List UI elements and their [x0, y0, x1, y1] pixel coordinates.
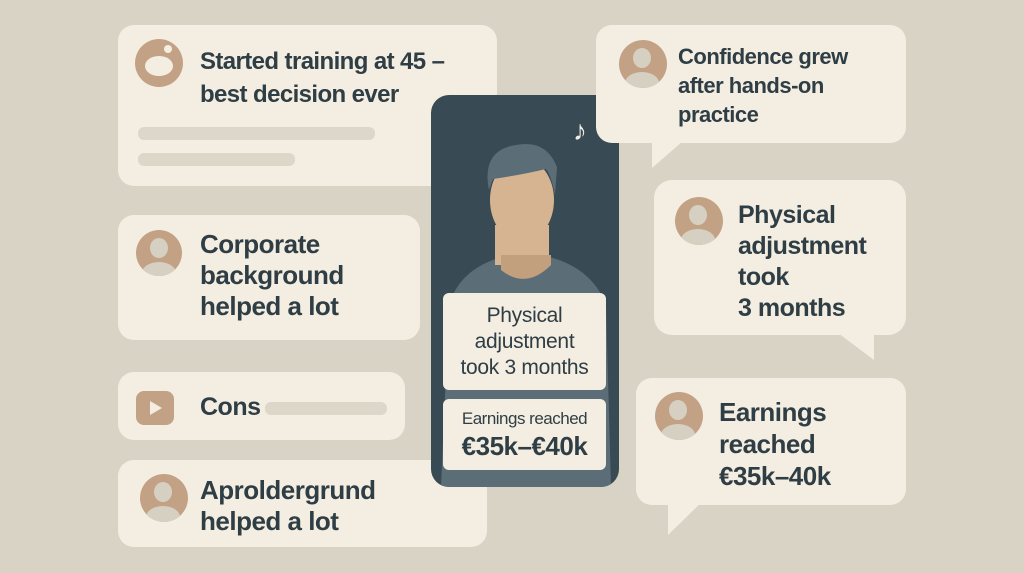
text: Corporate: [200, 229, 320, 259]
card: corporate background: [118, 215, 420, 340]
bubble: physical adjustment: [654, 180, 906, 360]
bubble: earnings reached: [636, 378, 906, 535]
text: best decision ever: [200, 81, 399, 108]
avatar: [675, 197, 723, 245]
phone: tiktok video: [431, 95, 619, 487]
text: Aproldergrund: [200, 475, 376, 505]
bubble: confidence grew: [596, 25, 906, 168]
phone caption: physical adjustment: adjustment: [475, 330, 574, 353]
text: helped a lot: [200, 291, 338, 321]
avatar: [619, 40, 667, 88]
person illustration: [441, 144, 611, 487]
text: helped a lot: [200, 506, 338, 536]
text: Cons: [200, 393, 260, 421]
text: Earnings: [719, 397, 826, 427]
avatar: [655, 392, 703, 440]
phone caption: physical adjustment: took 3 months: [460, 356, 588, 379]
phone caption: physical adjustment: Physical: [487, 304, 562, 327]
text: adjustment: [738, 232, 866, 260]
text: Physical: [738, 201, 835, 229]
text: 3 months: [738, 294, 845, 322]
text: background: [200, 260, 344, 290]
text: [200, 229, 344, 321]
text: Confidence grew: [678, 44, 848, 69]
text: [738, 201, 867, 322]
card: cons: [118, 372, 405, 440]
card: aproldergrund: [118, 460, 487, 547]
text: took: [738, 263, 789, 291]
icon: tiktok note: ♪: [573, 115, 587, 146]
text: after hands-on: [678, 73, 824, 98]
phone caption: earnings: €35k–€40k: [462, 431, 587, 461]
placeholder lines: [138, 127, 375, 140]
icon: youtube: [136, 391, 174, 425]
avatar: [140, 474, 188, 522]
phone caption: earnings: Earnings reached: [462, 409, 587, 428]
text: [200, 475, 376, 536]
phone caption: earnings: [443, 399, 606, 470]
text: practice: [678, 102, 758, 127]
phone caption: physical adjustment: [443, 293, 606, 390]
avatar: [136, 230, 182, 276]
text: reached: [719, 429, 815, 459]
text: [200, 48, 444, 108]
icon: reddit: [135, 39, 183, 87]
text: Started training at 45 –: [200, 48, 444, 75]
text: [678, 44, 848, 127]
text: [719, 397, 832, 491]
text: €35k–40k: [719, 461, 831, 491]
card: started training: [118, 25, 497, 186]
